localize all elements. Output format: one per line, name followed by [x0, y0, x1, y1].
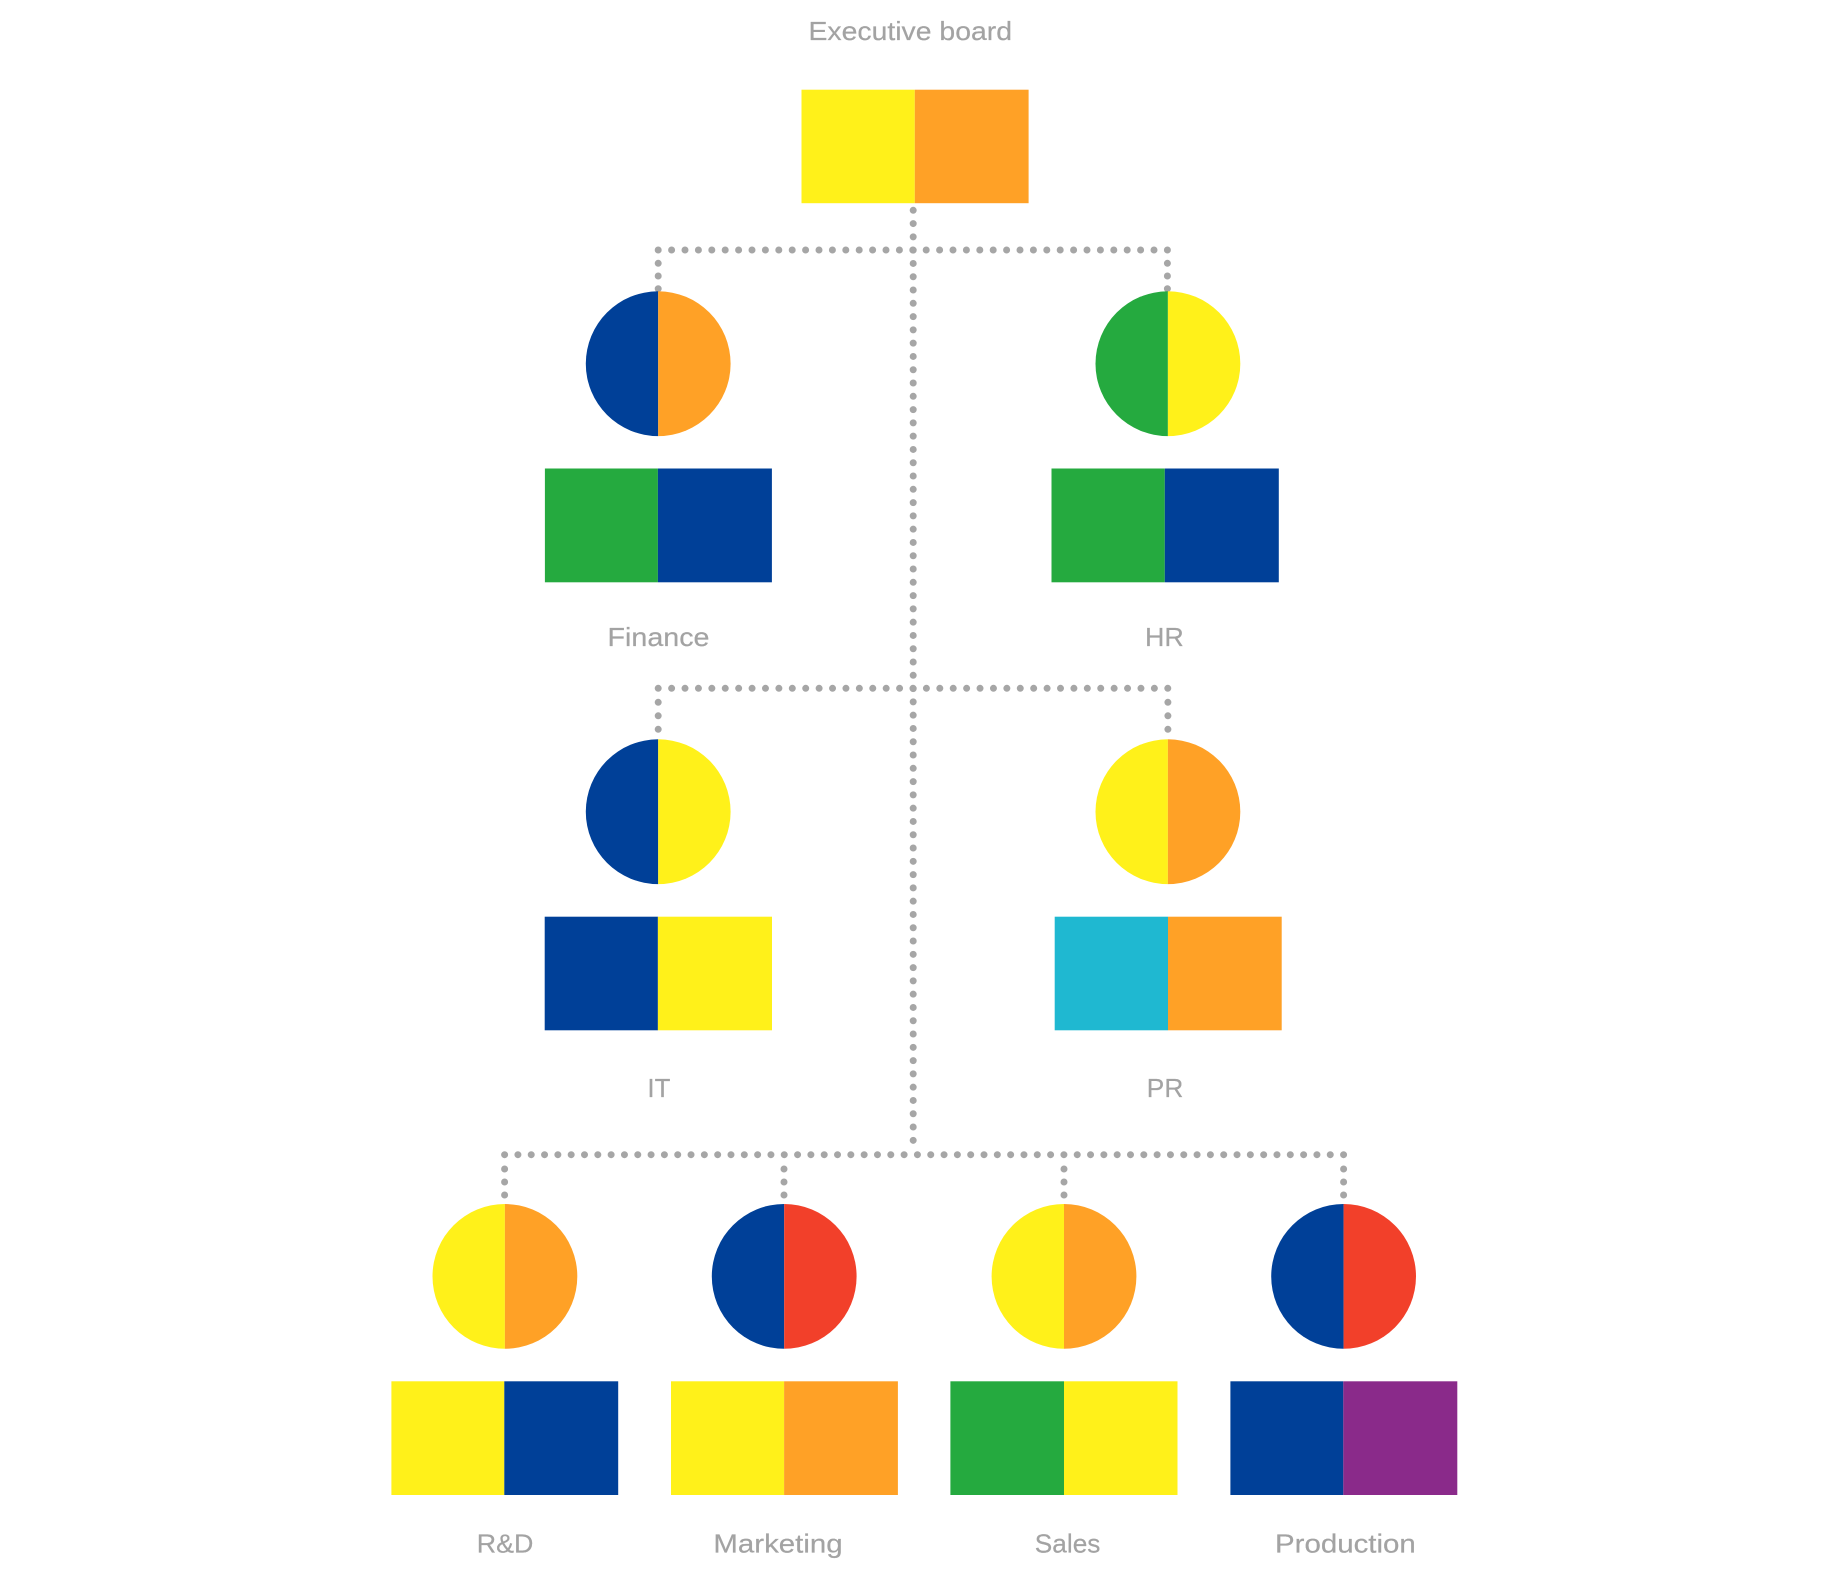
dotted connector lines	[505, 210, 1344, 1196]
label: Sales: Sales	[1035, 1528, 1100, 1558]
label: HR: HR	[1145, 622, 1184, 652]
circle: yellow and orange	[1096, 739, 1240, 884]
two-colour block: green and blue	[545, 468, 772, 582]
two-colour block: blue and purple	[1230, 1381, 1457, 1495]
circle: yellow and orange	[432, 1204, 577, 1349]
label: IT: IT	[647, 1073, 671, 1103]
two-colour block: green and blue	[1052, 468, 1279, 582]
label: R&D: R&D	[477, 1528, 533, 1558]
label: Production: Production	[1275, 1528, 1416, 1558]
two-colour block: blue and yellow	[545, 917, 772, 1030]
label: Marketing: Marketing	[713, 1528, 843, 1558]
two-colour block: green and yellow	[950, 1381, 1178, 1495]
two-colour block: yellow and orange	[802, 90, 1029, 203]
two-colour block: yellow and orange	[671, 1381, 898, 1495]
label: Finance: Finance	[608, 622, 710, 652]
node: Executive board	[802, 16, 1029, 203]
circle: blue and orange	[586, 291, 731, 436]
circle: yellow and orange	[992, 1204, 1136, 1349]
heading: Executive board: Executive board	[808, 16, 1012, 46]
node: Marketing	[671, 1204, 898, 1558]
node: Sales	[950, 1204, 1178, 1558]
circle: blue and yellow	[586, 739, 731, 884]
circle: blue and red	[712, 1204, 857, 1349]
node: Finance	[545, 291, 772, 652]
two-colour block: cyan and orange	[1055, 917, 1282, 1030]
two-colour block: yellow and blue	[391, 1381, 618, 1495]
node: IT	[545, 739, 772, 1103]
circle: green and yellow	[1096, 291, 1240, 436]
node: PR	[1055, 739, 1282, 1103]
node: HR	[1052, 291, 1279, 652]
node: Production	[1230, 1204, 1457, 1558]
circle: blue and red	[1271, 1204, 1416, 1349]
node: R&D	[391, 1204, 618, 1558]
label: PR: PR	[1147, 1073, 1183, 1103]
